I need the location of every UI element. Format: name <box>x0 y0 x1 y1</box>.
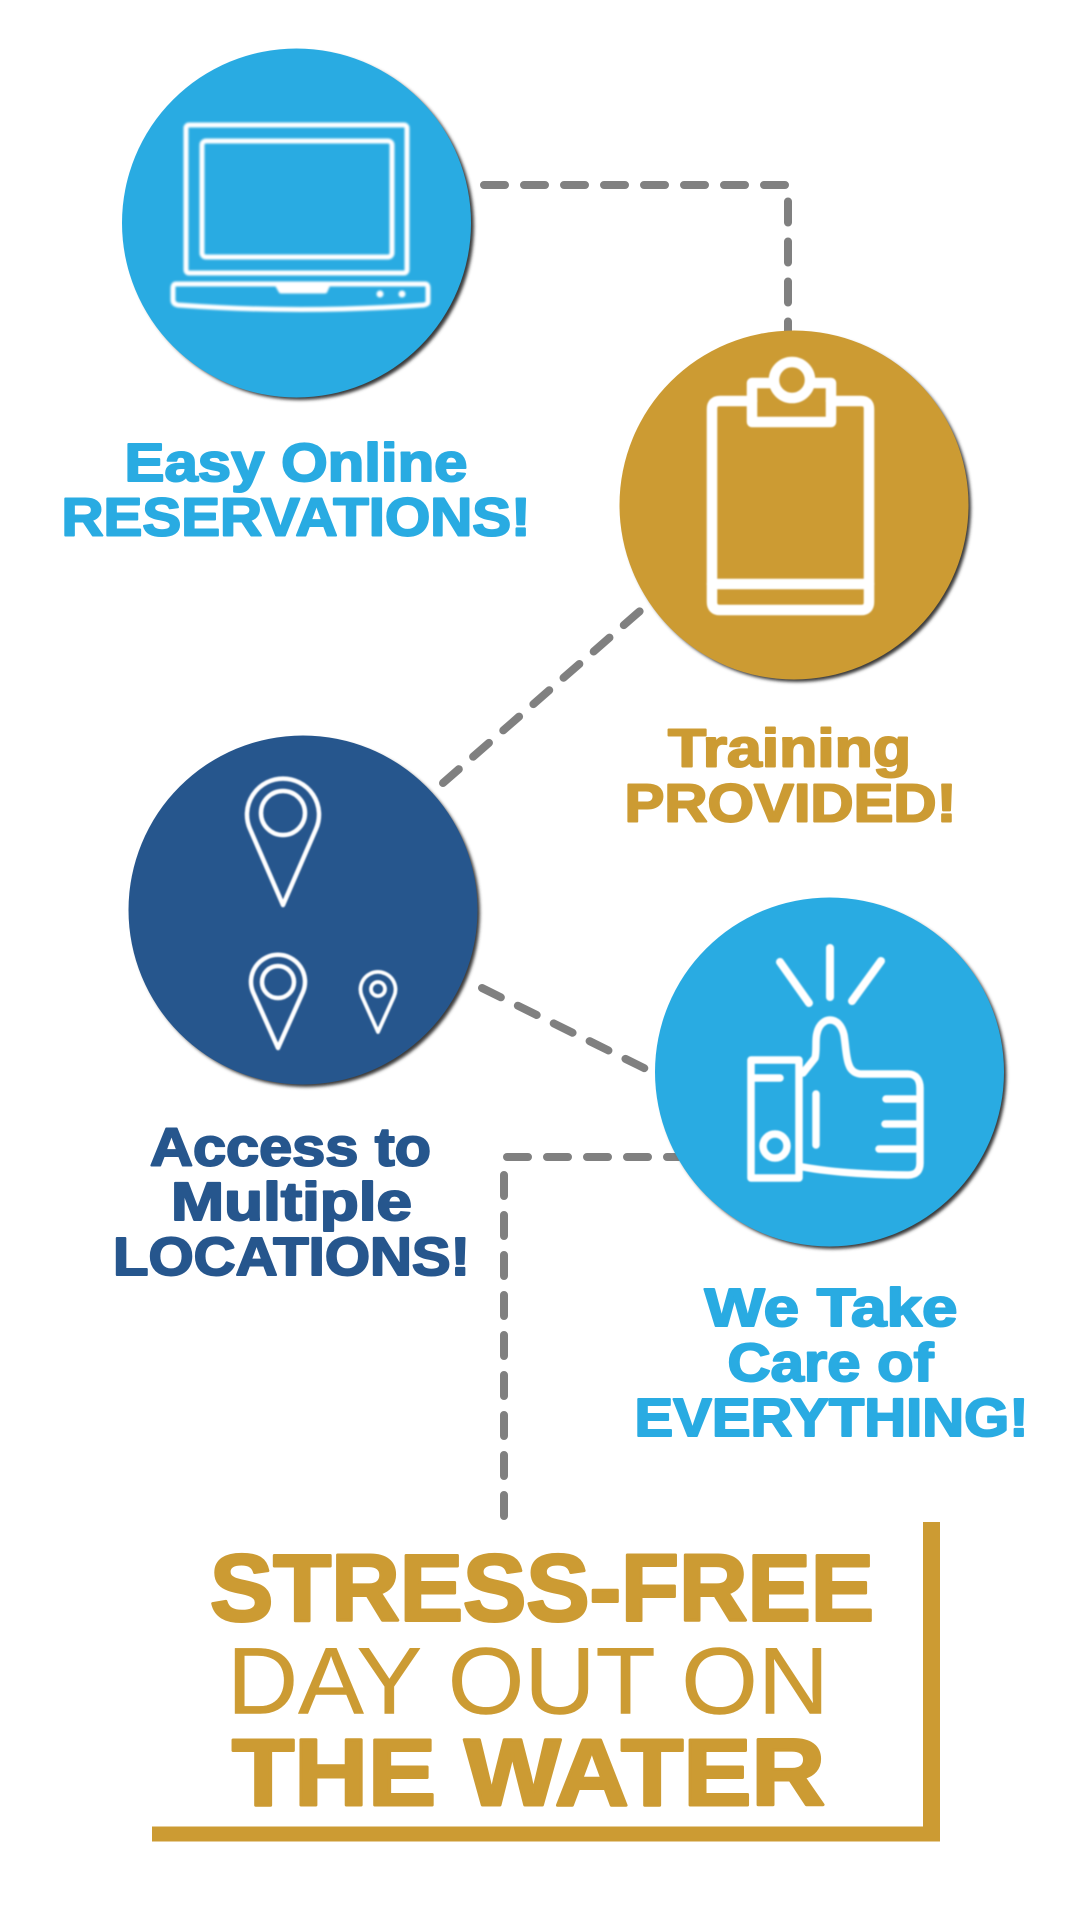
icon: clipboard <box>712 362 869 610</box>
label: access to multiple locations: Access to <box>150 1118 431 1178</box>
label: training provided: Training <box>668 718 911 778</box>
panel: training circle <box>620 330 971 682</box>
closing statement <box>210 1536 874 1826</box>
gold corner bracket <box>152 1522 940 1842</box>
label: we take care of everything: We Take <box>704 1278 958 1338</box>
dashed connector: thumbs up to closing statement <box>504 1157 690 1517</box>
closing statement: DAY OUT ON <box>227 1628 829 1734</box>
label: easy online reservations: Easy Online <box>124 433 468 493</box>
label: training provided: PROVIDED! <box>624 774 956 834</box>
dashed connector: clipboard to location pins <box>443 611 640 783</box>
label: we take care of everything: Care of <box>728 1333 935 1393</box>
label: access to multiple locations <box>113 1118 470 1287</box>
dashed connector: laptop to clipboard <box>484 185 788 345</box>
dashed connector: location pins to thumbs up <box>482 988 646 1069</box>
panel: thumbs up circle <box>655 898 1006 1249</box>
label: easy online reservations: RESERVATIONS! <box>62 488 530 548</box>
icon: thumbs up <box>751 948 920 1178</box>
label: training provided <box>624 718 956 834</box>
label: we take care of everything <box>634 1278 1028 1448</box>
label: we take care of everything: EVERYTHING! <box>634 1388 1028 1448</box>
icon: location pins <box>247 779 396 1048</box>
panel: online reservations circle <box>122 48 474 400</box>
label: easy online reservations <box>62 433 530 548</box>
icon: laptop <box>173 125 428 310</box>
label: access to multiple locations: Multiple <box>171 1172 412 1232</box>
closing statement: THE WATER <box>232 1720 825 1826</box>
closing statement: STRESS-FREE <box>210 1536 874 1642</box>
label: access to multiple locations: LOCATIONS! <box>113 1227 470 1287</box>
panel: multiple locations circle <box>128 736 480 1087</box>
